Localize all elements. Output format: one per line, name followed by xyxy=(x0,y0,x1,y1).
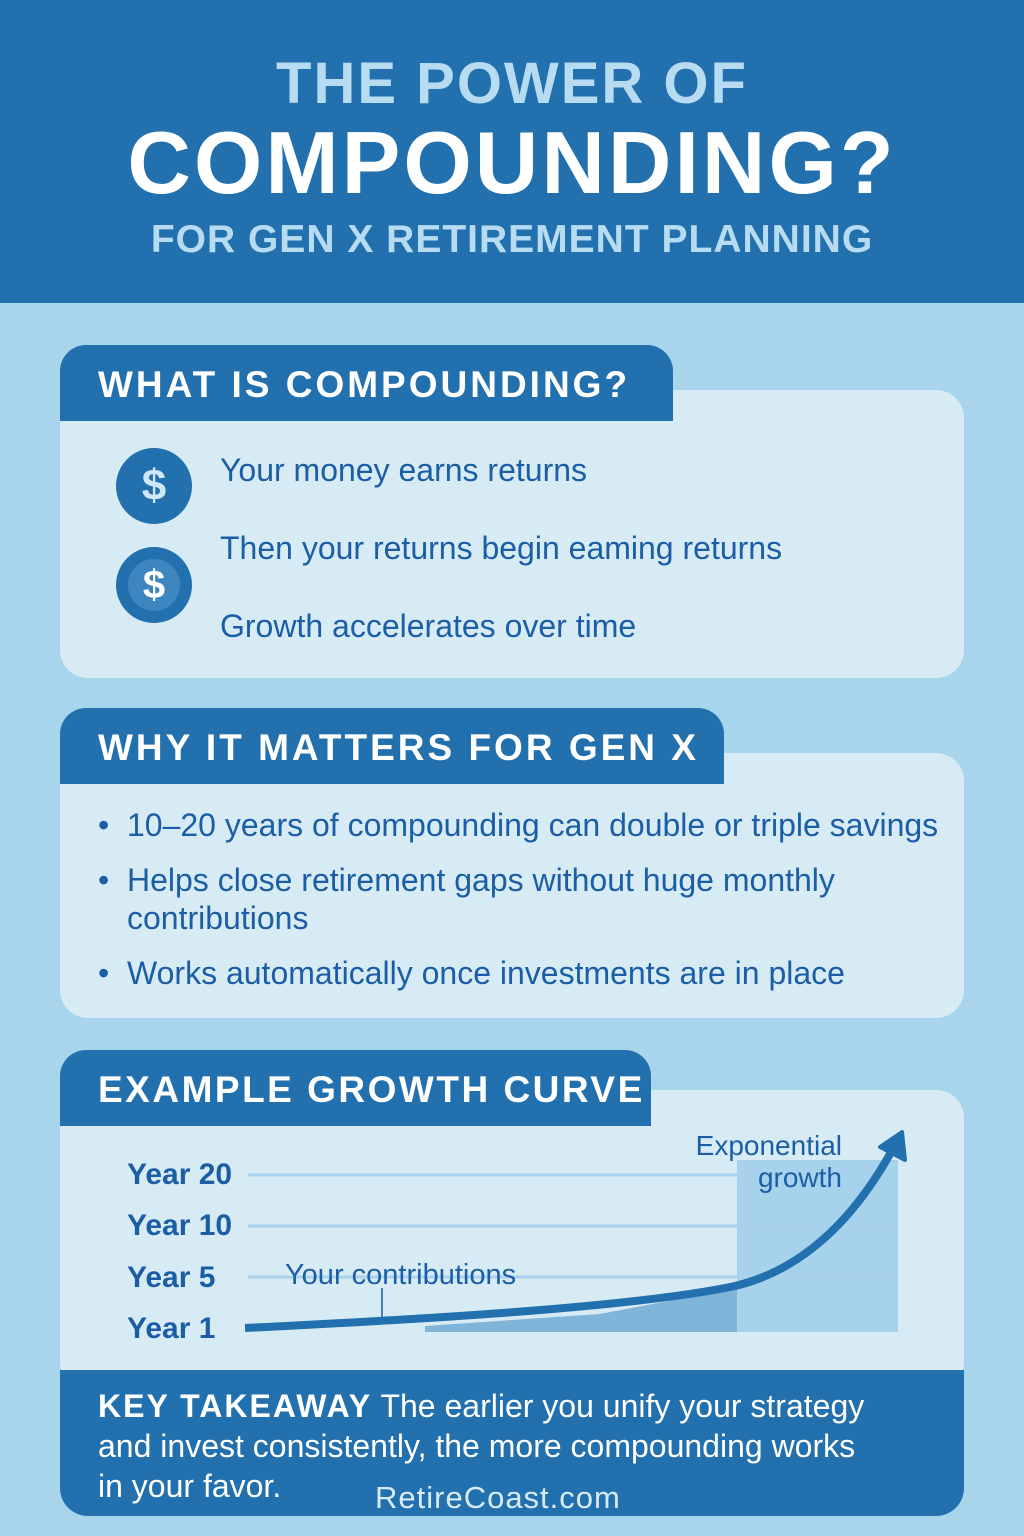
bullet list: • Works automatically once investments are in place xyxy=(98,955,845,991)
header xyxy=(0,0,1024,303)
heading: why it matters xyxy=(60,708,724,784)
callout: key takeaway: KEY TAKEAWAY The earlier you unify your strategy xyxy=(98,1388,864,1424)
heading: example growth curve xyxy=(60,1050,651,1126)
heading: why it matters: WHY IT MATTERS FOR GEN X xyxy=(98,727,699,768)
panel: what is compounding xyxy=(60,390,964,678)
chart: growth curve: Year 20 xyxy=(127,1158,232,1191)
bullet list: contributions xyxy=(127,900,308,936)
chart: growth curve: Year 10 xyxy=(127,1209,232,1242)
callout: key takeaway: in your favor. xyxy=(98,1468,281,1504)
heading: what is compounding: WHAT IS COMPOUNDING? xyxy=(98,364,630,405)
subtitle: FOR GEN X RETIREMENT PLANNING xyxy=(151,218,873,261)
title line 1: THE POWER OF xyxy=(276,51,748,116)
footer url: RetireCoast.com xyxy=(375,1480,621,1515)
text: Then your returns begin eaming returns xyxy=(220,530,782,566)
icon: dollar coin: $ xyxy=(142,461,166,510)
heading: example growth curve: EXAMPLE GROWTH CURVE xyxy=(98,1069,645,1110)
chart: growth curve: Your contributions xyxy=(285,1259,516,1291)
bullet list: • Helps close retirement gaps without huge monthly xyxy=(98,862,835,898)
icon: dollar cycle: $ xyxy=(143,563,165,607)
callout: key takeaway xyxy=(60,1370,964,1516)
text: Your money earns returns xyxy=(220,452,587,488)
panel: why it matters xyxy=(60,753,964,1018)
chart: growth curve: Year 5 xyxy=(127,1261,215,1294)
chart: growth curve: growth xyxy=(758,1162,842,1193)
icon: dollar cycle xyxy=(116,547,192,623)
chart: growth curve: Year 1 xyxy=(127,1312,215,1345)
chart: growth curve: Exponential xyxy=(696,1130,842,1161)
chart: growth curve xyxy=(127,1130,907,1345)
title line 2: COMPOUNDING? xyxy=(127,113,897,212)
icon: dollar coin xyxy=(116,448,192,524)
heading: what is compounding xyxy=(60,345,673,421)
panel: growth curve xyxy=(60,1090,964,1390)
callout: key takeaway: and invest consistently, the more compounding works xyxy=(98,1428,855,1464)
bullet list: • 10–20 years of compounding can double or triple savings xyxy=(98,807,938,843)
bullet list xyxy=(98,807,938,991)
text: Growth accelerates over time xyxy=(220,608,636,644)
